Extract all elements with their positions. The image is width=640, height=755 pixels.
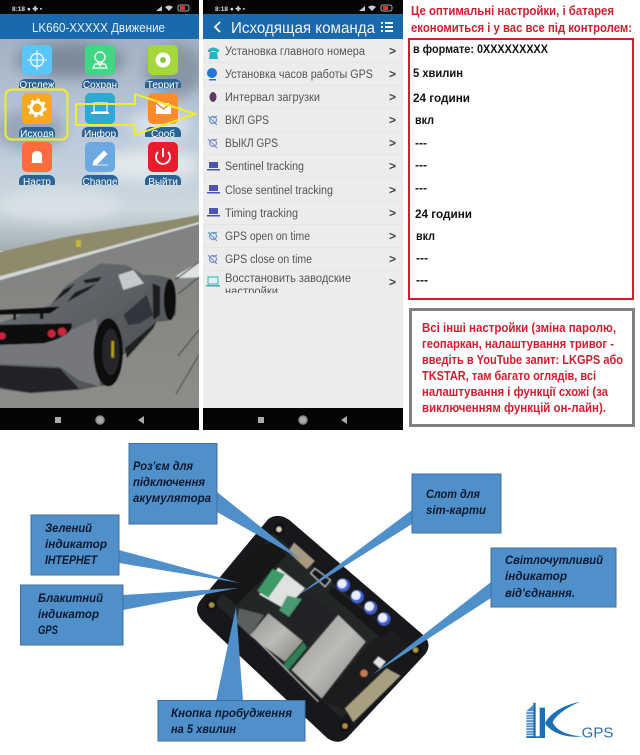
menu icons bbox=[206, 48, 220, 286]
callout: blue GPS indicator: Блакитний bbox=[38, 593, 103, 605]
callout: battery connector: підключення bbox=[133, 477, 205, 489]
icon labels bbox=[19, 79, 181, 189]
icon labels: Террит bbox=[147, 80, 180, 91]
panel: other settings note: виключенням функцій он-лайн). bbox=[422, 400, 606, 415]
icon: saved location bbox=[85, 45, 115, 75]
icon: change pencil bbox=[85, 142, 115, 172]
menu chevrons: > bbox=[389, 275, 396, 289]
icon labels: Сохран bbox=[83, 80, 117, 91]
navigation bar bbox=[0, 408, 199, 430]
panel: recommended values: в формате: 0XXXXXXXXX bbox=[413, 42, 548, 56]
icon: tracking bbox=[22, 45, 52, 75]
menu labels: Close sentinel tracking bbox=[225, 185, 333, 197]
panel: recommended values bbox=[409, 39, 633, 299]
callout: battery connector: акумулятора bbox=[133, 493, 212, 505]
callout: light sensor bbox=[372, 548, 616, 675]
menu labels: ВКЛ GPS bbox=[225, 115, 269, 127]
status bar bbox=[0, 0, 199, 14]
panel: recommended values: --- bbox=[415, 136, 427, 150]
menu chevrons: > bbox=[389, 206, 396, 220]
panel: GPS tracker device photo bbox=[197, 516, 429, 742]
callout: light sensor: індикатор bbox=[505, 571, 567, 583]
panel: other settings note bbox=[410, 310, 634, 426]
menu chevrons: > bbox=[389, 183, 396, 197]
menu labels: Timing tracking bbox=[225, 208, 298, 220]
callout: green internet indicator: індикатор bbox=[45, 539, 107, 551]
menu labels: Восстановить заводские bbox=[225, 273, 351, 285]
panel: recommended values: вкл bbox=[416, 229, 435, 243]
status bar: 8:18 ● ✤ ▪ bbox=[215, 5, 245, 13]
callout: green internet indicator: ІНТЕРНЕТ bbox=[45, 555, 98, 567]
menu chevrons: > bbox=[389, 90, 396, 104]
icon: message envelope bbox=[148, 93, 178, 124]
menu labels: GPS close on time bbox=[225, 254, 312, 266]
header bar: Исходящая команда bbox=[231, 20, 375, 37]
row dividers bbox=[203, 62, 403, 270]
panel: other settings note: TKSTAR, там багато оглядів, всі bbox=[422, 368, 596, 383]
icon labels: Отслеж bbox=[19, 80, 55, 91]
icon: settings bell bbox=[22, 142, 52, 172]
menu chevrons: > bbox=[389, 44, 396, 58]
menu chevrons: > bbox=[389, 159, 396, 173]
highlight: yellow frame around outgoing icon bbox=[6, 90, 68, 140]
header bar bbox=[0, 14, 199, 39]
icon labels: Инфор bbox=[84, 128, 116, 140]
menu labels: Интервал загрузки bbox=[225, 92, 320, 104]
callout: sim slot: Слот для bbox=[426, 489, 480, 501]
callout: blue GPS indicator bbox=[20, 585, 238, 645]
wallpaper photo with car bbox=[0, 39, 210, 420]
icon labels: Выйти bbox=[148, 177, 178, 188]
menu background bbox=[203, 39, 403, 408]
menu list bbox=[203, 44, 403, 298]
callout: wake button: Кнопка пробудження bbox=[171, 708, 292, 720]
navigation bar bbox=[203, 408, 403, 430]
status bar bbox=[203, 0, 403, 14]
app icons grid bbox=[19, 45, 181, 189]
panel: recommended values: --- bbox=[416, 251, 428, 265]
menu chevrons: > bbox=[389, 113, 396, 127]
menu chevrons: > bbox=[389, 252, 396, 266]
panel: other settings note: геопаркан, налаштування тривог - bbox=[422, 336, 614, 351]
logo: LK GPS: GPS bbox=[582, 726, 613, 742]
icon labels: Исходя bbox=[20, 129, 54, 140]
panel: recommended values: 5 хвилин bbox=[413, 66, 463, 80]
icon: exit power bbox=[148, 142, 178, 172]
panel: recommended values: --- bbox=[416, 273, 428, 287]
menu chevrons bbox=[389, 44, 396, 289]
panel: other settings note: Всі інші настройки (зміна паролю, bbox=[422, 320, 616, 335]
header bar: LK660-XXXXX Движение bbox=[32, 20, 165, 35]
icon labels: Настр bbox=[23, 177, 51, 188]
callout: light sensor: Світлочутливий bbox=[505, 555, 603, 567]
menu labels: Sentinel tracking bbox=[225, 161, 304, 173]
callout: sim slot: sim-карти bbox=[426, 505, 486, 517]
callout: battery connector bbox=[129, 444, 302, 560]
status bar: 8:18 ● ✤ ▪ bbox=[12, 5, 42, 13]
arrow: yellow outline arrow bbox=[76, 94, 195, 135]
callout: light sensor: від'єднання. bbox=[505, 588, 575, 600]
panel: recommended values: 24 години bbox=[415, 207, 472, 221]
callout: wake button: на 5 хвилин bbox=[171, 724, 236, 736]
menu chevrons: > bbox=[389, 136, 396, 150]
panel: recommended values: --- bbox=[415, 181, 427, 195]
panel: phone outgoing command menu bbox=[203, 0, 403, 430]
callout: green internet indicator: Зелений bbox=[45, 523, 92, 535]
callout: blue GPS indicator: GPS bbox=[38, 625, 58, 637]
menu labels: Установка часов работы GPS bbox=[225, 69, 373, 81]
menu labels: Установка главного номера bbox=[225, 46, 366, 58]
panel: phone home screen bbox=[0, 0, 210, 430]
menu chevrons: > bbox=[389, 67, 396, 81]
callout: wake button bbox=[158, 607, 305, 741]
heading: optimal settings: Це оптимальні настройки, і батарея bbox=[411, 3, 614, 18]
icon labels: Сооб bbox=[151, 128, 175, 140]
header bar bbox=[203, 14, 403, 39]
panel: recommended values: --- bbox=[415, 158, 427, 172]
callout: battery connector: Роз'єм для bbox=[133, 461, 193, 473]
panel: other settings note: налаштування і функції схожі (за bbox=[422, 384, 609, 399]
icon: info laptop bbox=[85, 93, 115, 124]
car bbox=[0, 263, 176, 393]
callout: blue GPS indicator: індикатор bbox=[38, 609, 99, 621]
panel: recommended values: 24 години bbox=[413, 91, 470, 105]
heading: optimal settings bbox=[411, 3, 632, 35]
icon: outgoing command gear bbox=[22, 93, 52, 124]
panel: recommended values: вкл bbox=[415, 113, 434, 127]
callout: sim slot bbox=[297, 474, 501, 596]
menu labels: ВЫКЛ GPS bbox=[225, 138, 278, 150]
icon: territory bbox=[148, 45, 178, 75]
icon labels: Change bbox=[82, 177, 118, 188]
menu labels bbox=[225, 46, 373, 298]
menu chevrons: > bbox=[389, 229, 396, 243]
menu labels: GPS open on time bbox=[225, 231, 310, 243]
callout: green internet indicator bbox=[31, 515, 240, 583]
logo: LK GPS bbox=[526, 702, 613, 742]
menu labels: настройки bbox=[225, 286, 278, 298]
